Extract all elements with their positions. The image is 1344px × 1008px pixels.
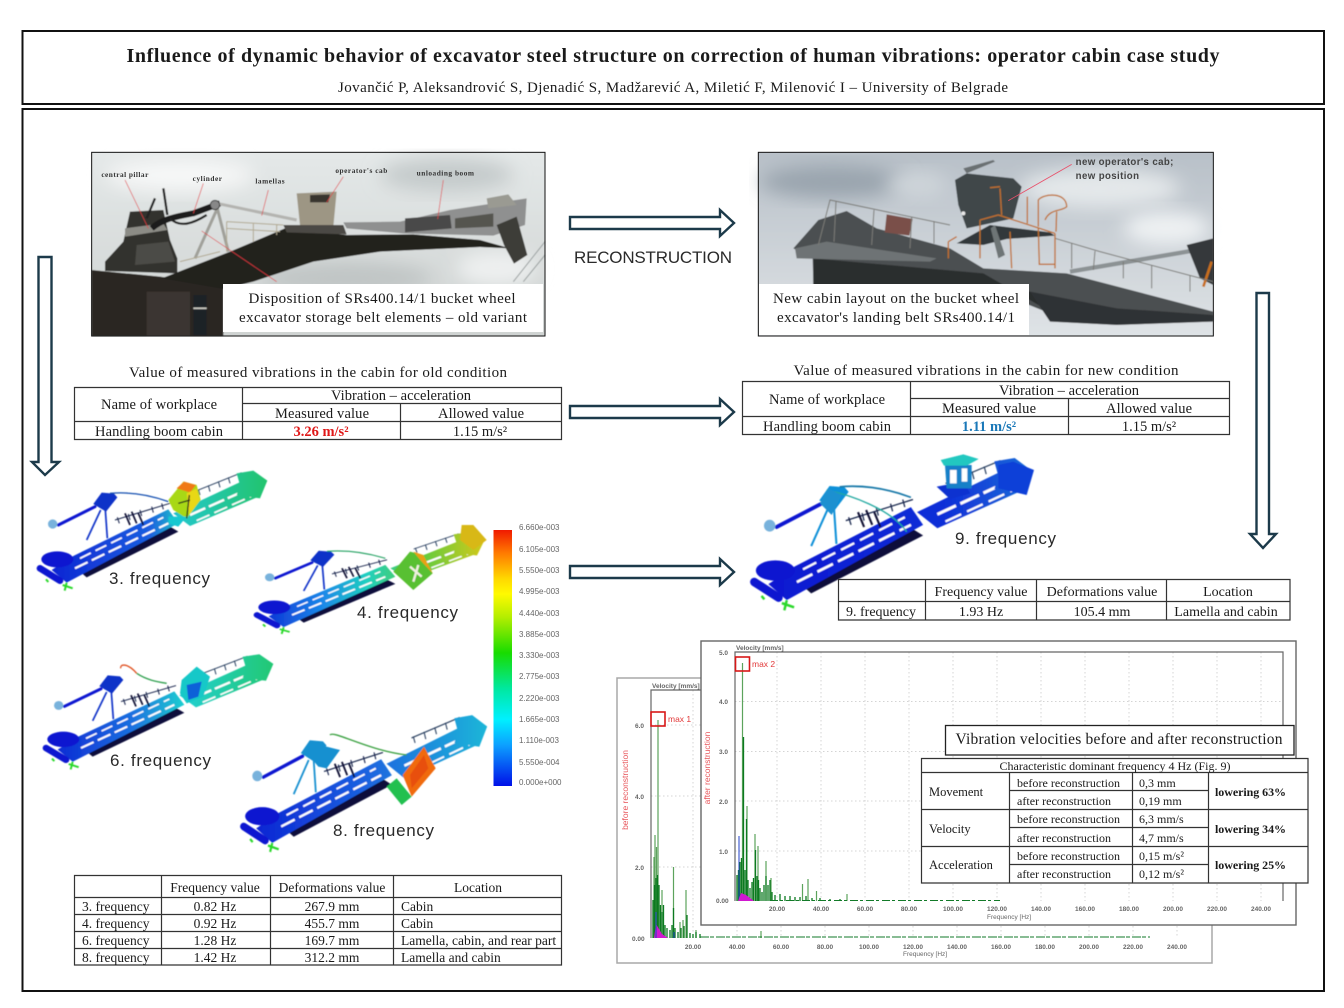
title: Influence of dynamic behavior of excavator steel structure on correction of human vibrations: operator cabin case study [126, 45, 1220, 67]
color scale legend: 3.885e-003 [519, 630, 560, 639]
table: frequency 9: 9. frequency [846, 605, 916, 620]
photo labels: central pillar [101, 170, 149, 179]
photo caption: excavator storage belt elements – old variant [239, 310, 528, 326]
table: characteristic dominant frequency: 0,3 mm [1139, 776, 1176, 790]
table: frequencies 3, 4, 6, 8: 6. frequency [82, 933, 150, 948]
model: 4. frequency [257, 525, 487, 634]
color scale legend: 6.660e-003 [519, 523, 560, 532]
table: characteristic dominant frequency: 0,12 m/s² [1139, 867, 1184, 881]
table: characteristic dominant frequency: Characteristic dominant frequency 4 Hz (Fig. 9) [1000, 759, 1230, 773]
x axis ticks: 220.00 [1123, 944, 1143, 951]
x axis ticks: 220.00 [1207, 906, 1227, 913]
table: frequencies 3, 4, 6, 8: 0.92 Hz [194, 916, 236, 931]
y axis ticks: 4.0 [719, 699, 728, 706]
x axis ticks: 240.00 [1167, 944, 1187, 951]
table: new condition: 1.15 m/s² [1122, 419, 1177, 435]
photo labels: operator's cab [335, 166, 387, 175]
color scale legend: 5.550e-003 [519, 566, 560, 575]
x axis ticks: 100.00 [859, 944, 879, 951]
color scale legend: 4.995e-003 [519, 587, 560, 596]
color scale legend: 4.440e-003 [519, 609, 560, 618]
chart: velocity spectrum after reconstruction [701, 641, 1296, 925]
table: new condition: Measured value [942, 401, 1036, 417]
x axis ticks: 20.00 [769, 906, 786, 913]
table: characteristic dominant frequency: 0,15 m/s² [1139, 849, 1184, 863]
x axis ticks: 60.00 [773, 944, 790, 951]
photo caption: excavator's landing belt SRs400.14/1 [777, 310, 1015, 326]
table: frequency 9 [838, 580, 1290, 620]
y axis ticks: 6.0 [635, 723, 644, 730]
table: old condition: 3.26 m/s² [293, 424, 349, 440]
table: characteristic dominant frequency: after reconstruction [1017, 794, 1111, 808]
table: frequencies 3, 4, 6, 8: 4. frequency [82, 916, 150, 931]
table: frequencies 3, 4, 6, 8: 1.42 Hz [194, 950, 236, 965]
y axis ticks: 0.00 [716, 898, 729, 905]
y axis ticks: 1.0 [719, 849, 728, 856]
table: frequencies 3, 4, 6, 8: 3. frequency [82, 899, 150, 914]
label: 8. frequency: 8. frequency [333, 821, 434, 840]
x axis ticks: 180.00 [1119, 906, 1139, 913]
table: frequencies 3, 4, 6, 8: 8. frequency [82, 950, 150, 965]
table: old condition: Name of workplace [101, 397, 217, 413]
x axis ticks: 120.00 [903, 944, 923, 951]
color scale legend: 6.105e-003 [519, 545, 560, 554]
y axis ticks [716, 650, 729, 905]
table: old condition: Handling boom cabin [95, 424, 224, 440]
label: 3. frequency: 3. frequency [109, 569, 210, 588]
color scale legend: 5.550e-004 [519, 758, 560, 767]
heading: vibration velocities: Vibration velocities before and after reconstruction [956, 731, 1283, 748]
table: characteristic dominant frequency: 0,19 mm [1139, 794, 1182, 808]
table: new condition [742, 363, 1230, 435]
x axis ticks: 180.00 [1035, 944, 1055, 951]
photo: new cabin layout on landing belt [758, 152, 1213, 336]
x axis ticks: 160.00 [1075, 906, 1095, 913]
table: frequencies 3, 4, 6, 8 [74, 876, 562, 965]
x axis ticks: 60.00 [857, 906, 874, 913]
x axis ticks: Frequency [Hz] [903, 951, 947, 958]
table: new condition: Handling boom cabin [763, 419, 892, 435]
table: characteristic dominant frequency: after reconstruction [1017, 831, 1111, 845]
arrow: models to model 9 [570, 559, 734, 585]
table: old condition: Allowed value [438, 406, 524, 422]
table: frequencies 3, 4, 6, 8: 1.28 Hz [194, 933, 236, 948]
label: 6. frequency: 6. frequency [110, 751, 212, 770]
y axis ticks: 5.0 [719, 650, 728, 657]
arrow: reconstruction [570, 210, 734, 236]
table: frequencies 3, 4, 6, 8: Frequency value [170, 880, 260, 895]
table: old condition: Value of measured vibrations in the cabin for old condition [129, 365, 508, 381]
photo caption: New cabin layout on the bucket wheel [773, 291, 1019, 307]
table: frequencies 3, 4, 6, 8: 312.2 mm [305, 950, 360, 965]
authors: Jovančić P, Aleksandrović S, Djenadić S, Madžarević A, Miletić F, Milenović I – University of Belgrade [338, 80, 1008, 96]
table: frequencies 3, 4, 6, 8: 267.9 mm [305, 899, 360, 914]
arrow: right down [1250, 293, 1276, 548]
title block [22, 31, 1324, 104]
table: frequency 9: Location [1203, 585, 1253, 600]
y axis ticks: 3.0 [719, 749, 728, 756]
table: frequencies 3, 4, 6, 8: 169.7 mm [305, 933, 360, 948]
table: new condition: Allowed value [1106, 401, 1192, 417]
max 2 marker [736, 657, 775, 671]
table: old condition: Measured value [275, 406, 369, 422]
heading: vibration velocities [946, 726, 1294, 755]
y axis ticks: 0.00 [632, 936, 645, 943]
table: frequency 9: 105.4 mm [1074, 605, 1130, 620]
photo caption [223, 284, 543, 332]
chart: velocity spectrum after reconstruction: Velocity [mm/s] [736, 645, 784, 652]
color scale legend [494, 523, 562, 787]
table: new condition: Value of measured vibrations in the cabin for new condition [794, 363, 1179, 379]
table: characteristic dominant frequency: Movement [929, 785, 984, 799]
color scale legend: 1.665e-003 [519, 715, 560, 724]
x axis ticks: Frequency [Hz] [987, 914, 1031, 921]
table: old condition: 1.15 m/s² [453, 424, 508, 440]
photo caption: Disposition of SRs400.14/1 bucket wheel [248, 291, 516, 307]
table: frequencies 3, 4, 6, 8: Cabin [401, 899, 433, 914]
photo annotation: new position [1076, 171, 1139, 182]
table: frequencies 3, 4, 6, 8: Location [454, 880, 502, 895]
table: old condition [74, 365, 562, 440]
photo labels: lamellas [255, 177, 285, 186]
x axis ticks [769, 906, 1271, 921]
table: frequencies 3, 4, 6, 8: Deformations value [279, 880, 385, 895]
table: frequencies 3, 4, 6, 8: Lamella and cabin [401, 950, 501, 965]
tail trace after [770, 900, 1000, 902]
x axis ticks: 160.00 [991, 944, 1011, 951]
color scale legend: 2.220e-003 [519, 694, 560, 703]
photo labels [101, 166, 474, 186]
x axis ticks: 200.00 [1079, 944, 1099, 951]
x axis ticks: 100.00 [943, 906, 963, 913]
table: characteristic dominant frequency: before reconstruction [1017, 812, 1120, 826]
table: characteristic dominant frequency [922, 758, 1308, 883]
y axis ticks [632, 723, 645, 943]
table: characteristic dominant frequency: lowering 63% [1215, 785, 1286, 799]
y axis ticks: 2.0 [635, 865, 644, 872]
x axis ticks: 200.00 [1163, 906, 1183, 913]
table: new condition: 1.11 m/s² [962, 419, 1016, 435]
x axis ticks: 40.00 [813, 906, 830, 913]
table: new condition: Vibration – acceleration [999, 383, 1140, 399]
table: frequencies 3, 4, 6, 8: Cabin [401, 916, 433, 931]
tail trace before [700, 936, 1150, 938]
x axis ticks: 240.00 [1251, 906, 1271, 913]
model: 9. frequency [754, 454, 1034, 610]
photo labels: unloading boom [417, 169, 474, 178]
y axis ticks: 2.0 [719, 799, 728, 806]
max 1 marker: max 1 [668, 714, 691, 724]
x axis ticks: 20.00 [685, 944, 702, 951]
table: frequencies 3, 4, 6, 8: Lamella, cabin, and rear part [401, 933, 556, 948]
x axis ticks: 140.00 [947, 944, 967, 951]
table: frequency 9: Deformations value [1047, 585, 1157, 600]
arrow: new cab pointer [1008, 164, 1072, 201]
chart: velocity spectrum before reconstruction [617, 678, 1212, 963]
table: characteristic dominant frequency: lowering 25% [1215, 858, 1286, 872]
x axis ticks: 40.00 [729, 944, 746, 951]
axis note before: before reconstruction [620, 750, 630, 830]
y axis ticks: 4.0 [635, 794, 644, 801]
photo annotation [1076, 157, 1173, 182]
table: characteristic dominant frequency: before reconstruction [1017, 849, 1120, 863]
table: new condition: Name of workplace [769, 392, 885, 408]
max 1 marker [651, 712, 691, 726]
table: characteristic dominant frequency: 4,7 mm/s [1139, 831, 1184, 845]
axis note after: after reconstruction [702, 731, 712, 804]
model: 8. frequency [244, 715, 487, 852]
label: 4. frequency: 4. frequency [357, 603, 458, 622]
photo: old cabin position on storage belt [92, 152, 545, 336]
x axis ticks [685, 944, 1187, 958]
x axis ticks: 120.00 [987, 906, 1007, 913]
x axis ticks: 80.00 [901, 906, 918, 913]
table: frequency 9: Frequency value [935, 585, 1027, 600]
label: reconstruction: RECONSTRUCTION [574, 248, 732, 267]
arrow: table to table [570, 399, 734, 425]
photo caption [759, 284, 1029, 335]
max 2 marker: max 2 [752, 659, 775, 669]
photo labels: cylinder [193, 174, 223, 183]
arrow: left down [32, 257, 59, 475]
color scale legend: 2.775e-003 [519, 672, 560, 681]
label: 9. frequency: 9. frequency [955, 529, 1056, 548]
x axis ticks: 140.00 [1031, 906, 1051, 913]
spectrum trace after [737, 663, 847, 901]
table: old condition: Vibration – acceleration [331, 388, 472, 404]
photo annotation: new operator's cab; [1076, 157, 1173, 168]
table: frequency 9: 1.93 Hz [959, 605, 1003, 620]
table: characteristic dominant frequency: Acceleration [929, 858, 994, 872]
color scale legend: 1.110e-003 [519, 736, 559, 745]
table: characteristic dominant frequency: lowering 34% [1215, 822, 1286, 836]
color scale legend: 0.000e+000 [519, 778, 562, 787]
model: 6. frequency [46, 654, 273, 769]
table: frequency 9: Lamella and cabin [1174, 605, 1278, 620]
spectrum trace before [653, 720, 761, 938]
table: characteristic dominant frequency: Velocity [929, 822, 971, 836]
model: 3. frequency [40, 471, 267, 591]
color scale legend: 3.330e-003 [519, 651, 560, 660]
table: characteristic dominant frequency: after reconstruction [1017, 867, 1111, 881]
x axis ticks: 80.00 [817, 944, 834, 951]
table: characteristic dominant frequency: before reconstruction [1017, 776, 1120, 790]
table: frequencies 3, 4, 6, 8: 455.7 mm [305, 916, 360, 931]
table: characteristic dominant frequency: 6,3 mm/s [1139, 812, 1184, 826]
table: frequencies 3, 4, 6, 8: 0.82 Hz [194, 899, 236, 914]
chart: velocity spectrum before reconstruction: Velocity [mm/s] [652, 683, 700, 690]
